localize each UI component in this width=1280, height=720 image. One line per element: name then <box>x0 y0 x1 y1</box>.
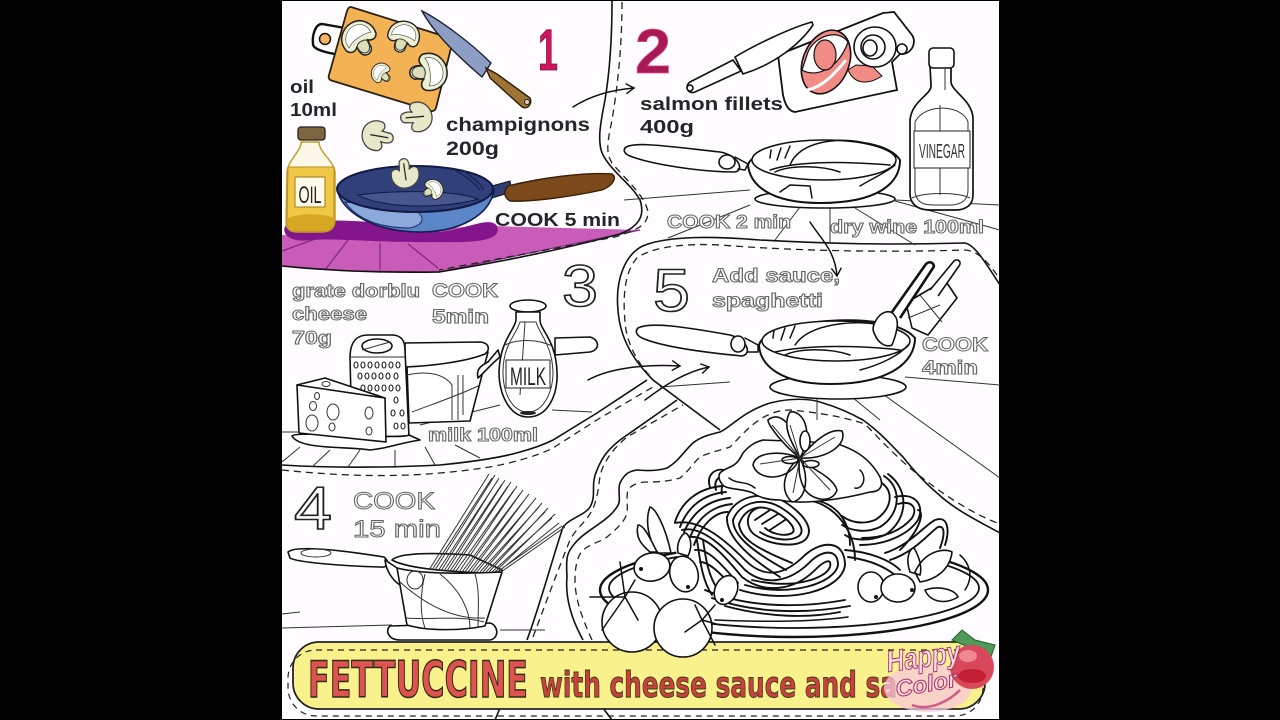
arrows: steps 3 and 4 to step 5 <box>588 366 709 400</box>
arrow: step 1 to step 2 <box>573 88 634 107</box>
icon: mushrooms on the board <box>335 15 449 92</box>
icon: blue frying pan <box>337 166 614 232</box>
icon: frying pan with tongs, step 5 <box>636 260 960 399</box>
step 3 labels: grate dorblu <box>292 281 420 301</box>
vinegar label text: VINEGAR <box>919 141 965 163</box>
floor lines <box>282 190 1000 640</box>
icon: milk bottle <box>499 300 557 417</box>
icon: pot with dry spaghetti <box>288 474 565 640</box>
basil flower <box>753 412 843 502</box>
oil label text: OIL <box>298 182 322 209</box>
step 3 labels: milk 100ml <box>428 425 538 445</box>
icon: cheese grater <box>350 335 409 437</box>
title banner <box>288 642 985 716</box>
step 5 labels: spaghetti <box>712 291 823 312</box>
spaghetti strands <box>429 474 565 572</box>
icon: vinegar bottle <box>910 48 973 210</box>
step 1 labels: champignons <box>446 115 590 136</box>
knife on salmon board <box>687 22 813 93</box>
step 1 labels <box>290 77 620 230</box>
icon: vine tomatoes over the banner <box>590 562 720 657</box>
icon: salmon on cutting board <box>687 12 914 112</box>
step 5 labels: Add sauce, <box>712 266 840 287</box>
icon: orange cutting board <box>313 7 452 111</box>
number 4: 4 <box>294 475 332 542</box>
step 3 labels: COOK <box>432 281 498 302</box>
page background <box>282 1 999 719</box>
basil leaves <box>637 507 958 601</box>
logo: Happy Color: Color <box>893 665 960 702</box>
cherry tomatoes and olives <box>632 550 915 608</box>
step 3 labels: 70g <box>292 328 332 348</box>
step 3 labels: 5min <box>432 307 489 328</box>
step 4 labels: COOK <box>353 488 435 515</box>
logo: Happy Color <box>884 630 995 712</box>
sauce mound <box>719 440 882 502</box>
spice box behind tongs <box>906 280 957 335</box>
icon: falling mushrooms <box>360 101 433 190</box>
icon: frying pan, step 2 <box>624 140 900 208</box>
step 2 labels: COOK 2 min <box>667 212 791 232</box>
step 2 labels <box>640 94 984 237</box>
step 4 labels: 15 min <box>353 516 441 543</box>
number 1: 1 <box>538 18 558 83</box>
step 4 labels <box>353 488 441 543</box>
step 1 labels: oil <box>290 77 314 97</box>
step 2 labels: salmon fillets <box>640 94 783 114</box>
number 3: 3 <box>562 254 598 319</box>
icon: oil bottle <box>286 127 335 232</box>
icon: kitchen knife <box>422 11 531 108</box>
step 3 labels: cheese <box>292 304 367 324</box>
step 2 labels: dry wine 100ml <box>830 217 984 237</box>
tongs <box>892 262 934 318</box>
title: fettuccine: FETTUCCINE <box>308 651 528 709</box>
title: subtitle: with cheese sauce and sa <box>540 665 897 706</box>
arrow: step 2 to step 5 <box>810 222 837 276</box>
number 2: 2 <box>635 17 671 87</box>
step 5 labels <box>712 266 988 379</box>
icon: wedge of dorblu cheese <box>292 378 420 450</box>
step 5 labels: COOK <box>922 335 988 356</box>
step 1 labels: 200g <box>446 139 499 160</box>
step 3 labels <box>292 281 538 445</box>
step 1 labels: COOK 5 min <box>495 210 620 230</box>
sauce on tongs <box>873 312 897 346</box>
step 2 labels: 400g <box>640 117 694 137</box>
step 5 labels: 4min <box>922 358 978 379</box>
logo: Happy Color: Happy <box>884 636 963 679</box>
pasta strands <box>674 470 948 616</box>
number 5: 5 <box>653 257 690 324</box>
milk label text: MILK <box>510 363 546 391</box>
panel outlines and stitched borders <box>282 1 1000 720</box>
panel 1: floor and mat <box>282 220 640 272</box>
icon: pot behind milk <box>405 337 598 423</box>
icon: plate of fettuccine <box>600 412 988 637</box>
step 1 labels: 10ml <box>290 100 337 120</box>
plate <box>600 543 988 637</box>
